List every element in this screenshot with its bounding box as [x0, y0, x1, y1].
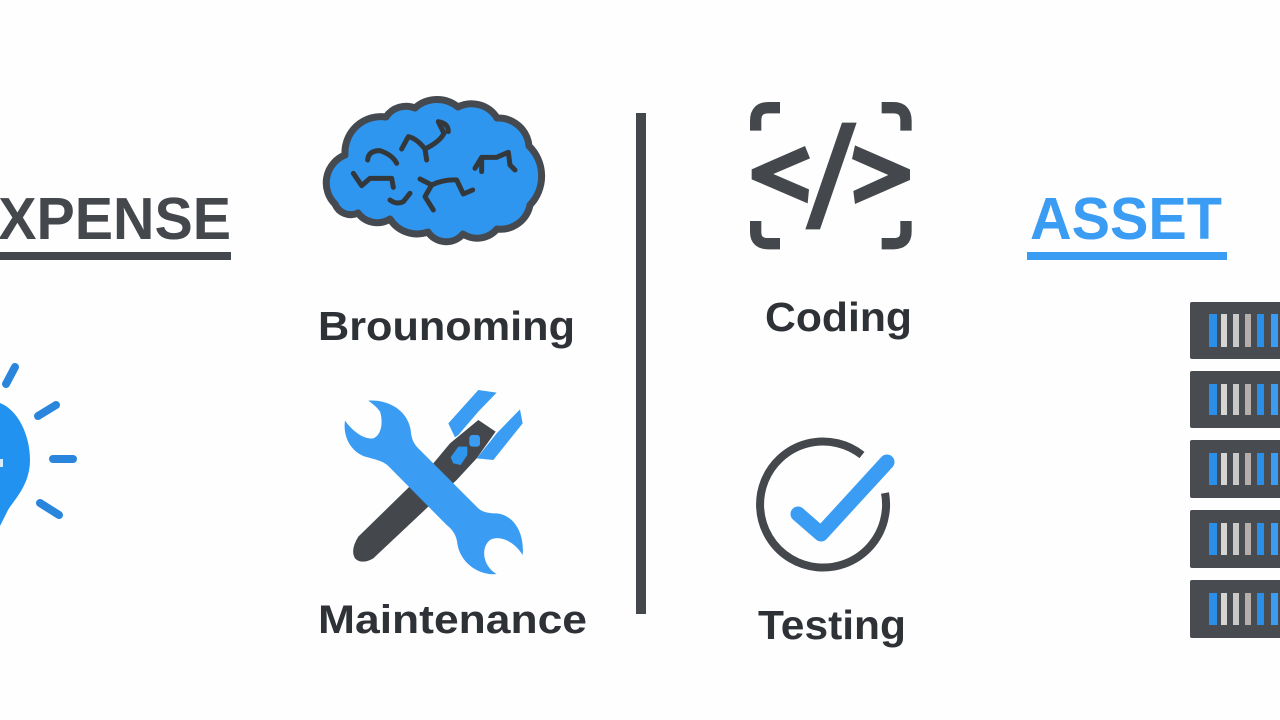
server unit 2 [1190, 371, 1280, 428]
icon: light bulb [0, 367, 73, 526]
server unit 3 [1190, 440, 1280, 498]
divider [636, 113, 646, 614]
icon: check mark in circle [760, 442, 887, 568]
label: testing: Testing [758, 602, 906, 648]
icon: code brackets [752, 108, 910, 244]
server unit 4 [1190, 510, 1280, 568]
label: maintenance: Maintenance [318, 598, 587, 642]
server unit 5 [1190, 580, 1280, 638]
icon: brain [326, 100, 542, 242]
label: coding: Coding [765, 294, 912, 340]
server unit 1 [1190, 302, 1280, 359]
label: brounoming: Brounoming [318, 303, 575, 349]
icon: crossed wrench and screwdriver [345, 390, 523, 574]
heading: asset: ASSET [1030, 186, 1222, 252]
icon: server stack [1190, 302, 1280, 638]
